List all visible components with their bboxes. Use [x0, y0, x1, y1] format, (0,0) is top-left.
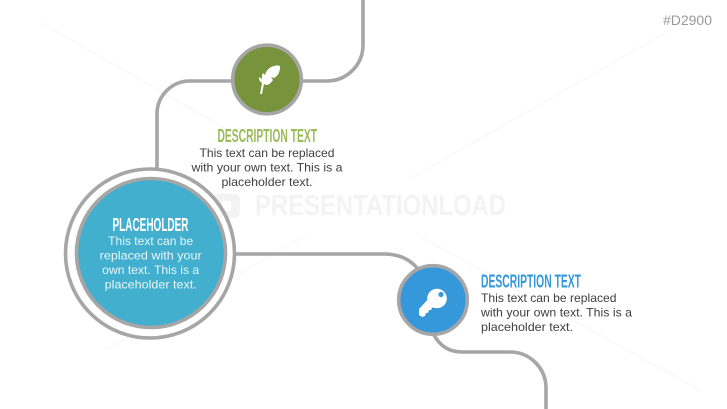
placeholder heading: PLACEHOLDER	[112, 215, 188, 235]
green description: with your own text. This is a	[190, 160, 343, 174]
blue node	[399, 266, 467, 334]
green node	[233, 45, 301, 114]
placeholder text	[100, 234, 202, 292]
main placeholder circle	[66, 169, 234, 338]
connector: middle path	[230, 254, 420, 272]
blue description: DESCRIPTION TEXT	[481, 272, 581, 292]
watermark	[213, 190, 506, 224]
green description	[190, 126, 343, 189]
blue description	[480, 272, 632, 334]
placeholder text: replaced with your	[100, 248, 202, 262]
icon: key	[419, 289, 447, 317]
blue description: with your own text. This is a	[480, 306, 632, 320]
placeholder text: This text can be	[108, 234, 194, 248]
slide code: #D2900	[663, 13, 712, 28]
icon: feather	[259, 65, 280, 94]
watermark: PRESENTATIONLOAD	[255, 190, 506, 222]
placeholder text: own text. This is a	[102, 263, 200, 277]
connector: top path	[157, 0, 363, 170]
green description: DESCRIPTION TEXT	[218, 126, 317, 146]
blue description: placeholder text.	[481, 320, 573, 334]
placeholder text: placeholder text.	[105, 278, 197, 292]
green description: This text can be replaced	[200, 146, 334, 160]
green description: placeholder text.	[222, 175, 312, 189]
connector: bottom path	[434, 335, 546, 409]
blue description: This text can be replaced	[481, 291, 616, 305]
